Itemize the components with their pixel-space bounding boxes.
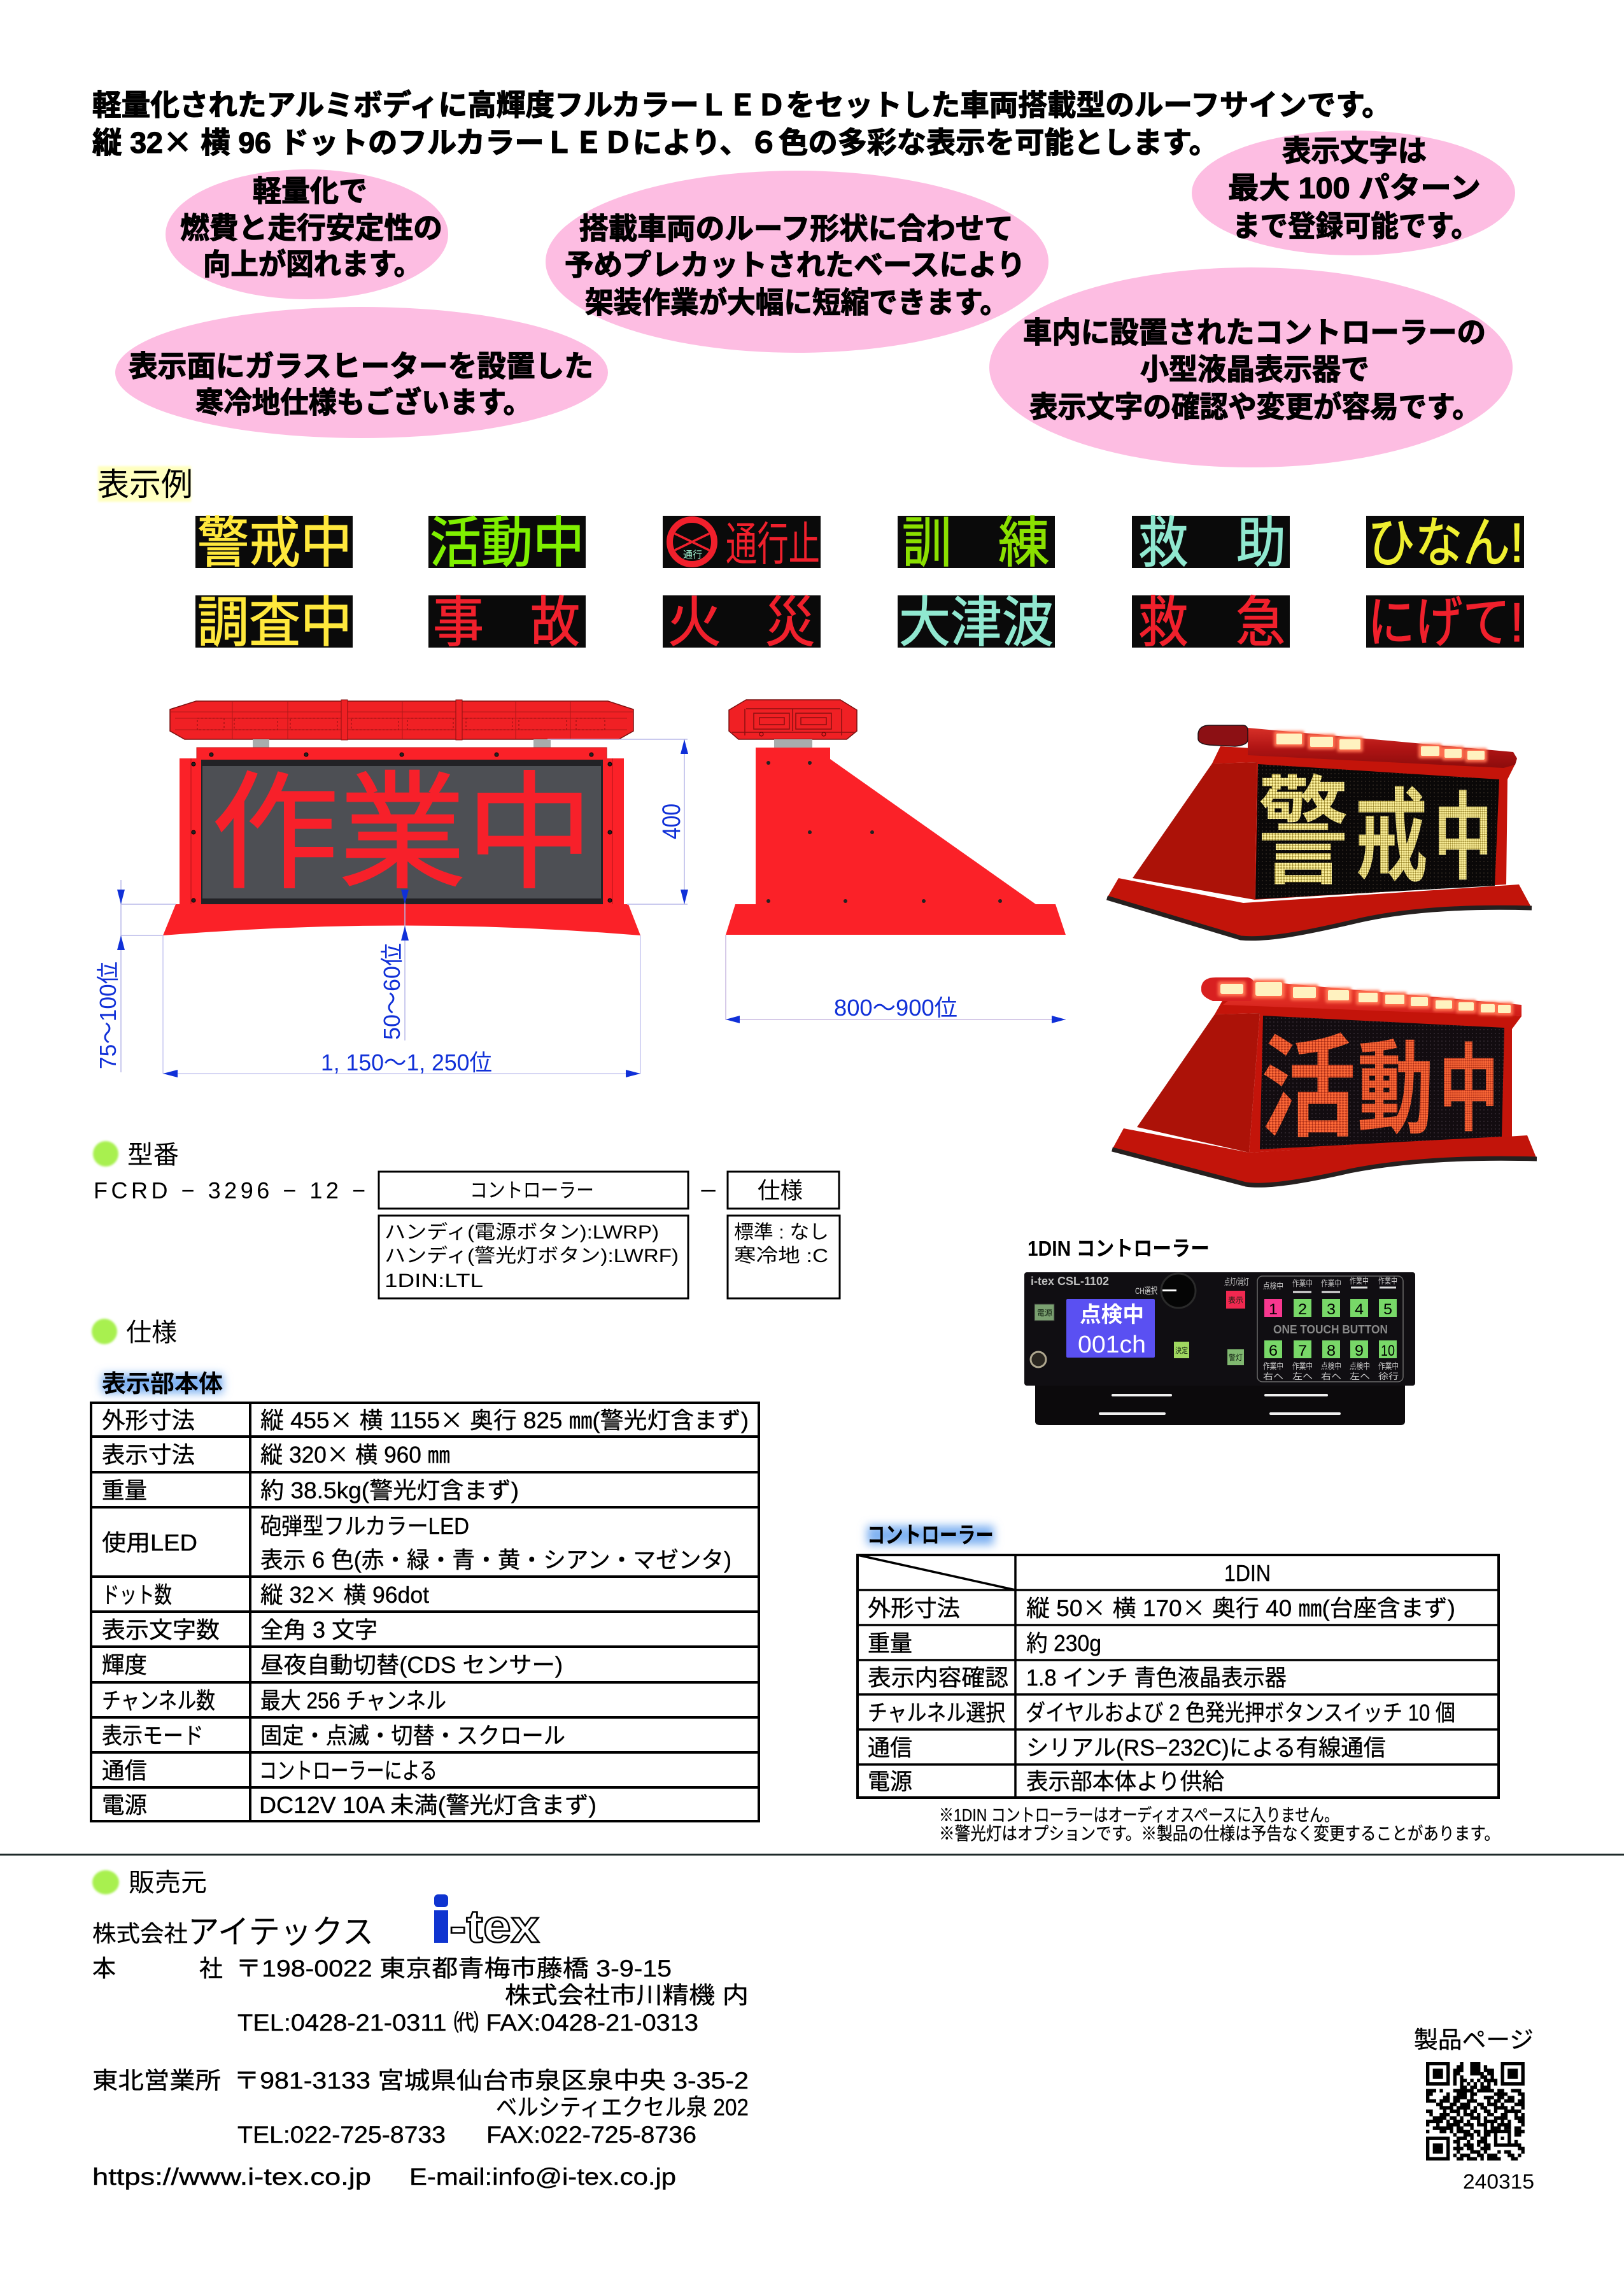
- one touch panel: 3: [1327, 1301, 1336, 1318]
- dimension: 50〜60: [379, 890, 409, 1040]
- callout: コントローラー: 表示文字の確認や変更が容易です。: [1029, 390, 1481, 423]
- callout: 表示文字登録: 表示文字は: [1282, 134, 1427, 167]
- head office address: 本: [92, 1956, 116, 1982]
- one touch panel: 作業中: [1350, 1276, 1369, 1286]
- logo: i-tex: [434, 1894, 539, 1952]
- callout: 架装作業: [546, 171, 1049, 353]
- callout: 寒冷地仕様: 寒冷地仕様もございます。: [195, 386, 532, 419]
- tile: 救急: [1132, 592, 1290, 653]
- row: 電源: [868, 1768, 1224, 1794]
- Tohoku office address: [92, 2068, 749, 2148]
- intro text: 軽量化されたアルミボディに高輝度フルカラーＬＥＤをセットした車両搭載型のルーフサインです。: [92, 89, 1391, 122]
- LCD screen: 点検中: [1080, 1303, 1144, 1327]
- callout: 寒冷地仕様: 表示面にガラスヒーターを設置した: [129, 350, 593, 383]
- side buttons: 決定: [1175, 1346, 1188, 1355]
- dimension: depth: [726, 935, 1066, 1023]
- Tohoku office address: 〒981-3133 宮城県仙台市泉区泉中央 3-35-2: [234, 2068, 749, 2094]
- callout: コントローラー: 小型液晶表示器で: [1140, 353, 1369, 386]
- Tohoku office address: TEL:022-725-8733: [237, 2122, 446, 2148]
- head office address: TEL:0428-21-0311 ㈹ FAX:0428-21-0313: [237, 2010, 698, 2036]
- tile: 調査中: 調査中: [197, 592, 352, 653]
- callout: 表示文字登録: [1192, 131, 1515, 255]
- photo: 活動中: 動: [1357, 1032, 1434, 1146]
- QR code: [1426, 2062, 1525, 2161]
- photo: 警戒中: [1107, 725, 1532, 939]
- tile: 救助: 救: [1138, 513, 1188, 574]
- row: 輝度: 輝度: [102, 1652, 147, 1678]
- one touch panel: 5: [1383, 1301, 1392, 1318]
- Tohoku office address: ベルシティエクセル泉 202: [496, 2094, 749, 2120]
- company name: アイテックス: [188, 1914, 374, 1951]
- heading: 表示例: 表示例: [97, 467, 193, 502]
- dimension: 50〜60: 50〜60位: [379, 943, 405, 1040]
- side buttons: 警灯: [1229, 1352, 1243, 1362]
- row: 重量: 重量: [868, 1630, 912, 1656]
- table: display unit specs: [91, 1402, 759, 1821]
- row: チャルネル選択: ダイヤルおよび 2 色発光押ボタンスイッチ 10 個: [1026, 1700, 1455, 1726]
- controller options: 1DIN:LTL: [385, 1270, 483, 1291]
- intro text: 縦 32× 横 96 ドットのフルカラーＬＥＤにより、６色の多彩な表示を可能とします。: [92, 120, 1218, 162]
- row: 表示モード: 固定・点滅・切替・スクロール: [260, 1722, 565, 1749]
- photo: 警戒中: 警: [1258, 767, 1348, 898]
- one touch panel: 2: [1298, 1301, 1307, 1318]
- row: 通信: 通信: [102, 1757, 147, 1784]
- tile: 通行止: 通行止: [726, 520, 820, 571]
- tile: 通行止: [663, 516, 821, 571]
- row: 電源: 表示部本体より供給: [1026, 1768, 1224, 1794]
- caption: 1DIN コントローラー: 1DIN コントローラー: [1027, 1237, 1210, 1260]
- dimension: height 400: [547, 739, 688, 904]
- spec options: 標準 : なし: [734, 1222, 829, 1243]
- one touch panel: 右へ: [1263, 1372, 1283, 1381]
- dimension: 75〜100: 75〜100位: [95, 962, 121, 1069]
- section: 型番: 型番: [127, 1141, 179, 1169]
- head office address: 株式会社市川精機 内: [505, 1982, 749, 2008]
- web and email: https://www.i-tex.co.jp: [92, 2164, 371, 2190]
- callout: 架装作業: 予めプレカットされたベースにより: [565, 248, 1026, 281]
- tile: 救急: 救: [1138, 592, 1188, 653]
- tile: 事故: [428, 592, 586, 653]
- section: 販売元: 販売元: [129, 1869, 207, 1897]
- table: controller specs: [858, 1555, 1499, 1798]
- callout: コントローラー: 車内に設置されたコントローラーの: [1023, 316, 1486, 349]
- row: 重量: 約 230g: [1026, 1630, 1101, 1656]
- row: 電源: 電源: [102, 1792, 147, 1818]
- row: 表示内容確認: 1.8 インチ 青色液晶表示器: [1026, 1665, 1287, 1691]
- row: 表示内容確認: 表示内容確認: [868, 1665, 1008, 1691]
- controller options: ハンディ(警光灯ボタン):LWRF): [385, 1246, 679, 1267]
- row: チャルネル選択: [868, 1700, 1455, 1726]
- tile: 警戒中: 警戒中: [197, 513, 352, 574]
- LCD screen: [1066, 1299, 1155, 1358]
- row: チャルネル選択: チャルネル選択: [868, 1700, 1005, 1726]
- row: 表示文字数: 全角 3 文字: [260, 1617, 378, 1643]
- row: 外形寸法: 外形寸法: [868, 1595, 960, 1621]
- section: 販売元: [92, 1869, 207, 1897]
- callout: 軽量化: [166, 169, 448, 299]
- row: ドット数: ドット数: [102, 1582, 172, 1608]
- controller options: [379, 1216, 688, 1298]
- row: 表示寸法: 縦 320× 横 960 ㎜: [260, 1437, 450, 1470]
- one touch panel: 9: [1355, 1342, 1364, 1360]
- section: 型番: [93, 1141, 179, 1169]
- one touch panel: ONE TOUCH BUTTON: [1273, 1323, 1388, 1336]
- row: 電源: DC12V 10A 未満(警光灯含まず): [259, 1792, 597, 1818]
- one touch panel: 8: [1327, 1342, 1336, 1360]
- photo: 活動中: 中: [1439, 1037, 1499, 1143]
- one touch panel: 作業中: [1378, 1361, 1399, 1371]
- tile: 大津波: 大津波: [899, 592, 1054, 653]
- row: 通信: コントローラーによる: [259, 1757, 437, 1784]
- row: 表示寸法: 表示寸法: [102, 1442, 195, 1468]
- one touch panel: 点検中: [1263, 1281, 1283, 1291]
- photo: 活動中: [1112, 977, 1537, 1186]
- one touch panel: 作業中: [1378, 1276, 1397, 1286]
- dimension: height 400: 400: [658, 804, 686, 839]
- row: 外形寸法: 外形寸法: [102, 1407, 195, 1433]
- model number: FCRD − 3296 − 12 −: [94, 1177, 365, 1203]
- dimension: 75〜100: [95, 880, 176, 1072]
- row: 通信: [868, 1735, 1386, 1761]
- tile: 事故: 事: [433, 592, 484, 653]
- tile: 訓練: 訓: [902, 513, 952, 574]
- tile: 活動中: 活動中: [430, 513, 584, 574]
- company name: [92, 1914, 374, 1951]
- tile: 訓練: [898, 513, 1055, 574]
- row: 表示寸法: [102, 1437, 450, 1470]
- tile: 救助: 助: [1236, 513, 1286, 574]
- row: ドット数: [102, 1577, 429, 1610]
- side buttons: 電源: [1037, 1309, 1052, 1317]
- row: 電源: 電源: [868, 1768, 912, 1794]
- web and email: E-mail:info@i-tex.co.jp: [409, 2164, 676, 2190]
- callout: 表示文字登録: まで登録可能です。: [1232, 209, 1479, 243]
- warning light bar: [170, 700, 633, 740]
- one touch panel: 1: [1269, 1301, 1278, 1318]
- web and email: [92, 2164, 676, 2190]
- one touch panel: 作業中: [1292, 1279, 1313, 1288]
- model number: 仕様: [758, 1177, 803, 1203]
- side buttons: [1031, 1277, 1249, 1367]
- intro text: [92, 89, 1391, 162]
- row: 外形寸法: 縦 455× 横 1155× 奥行 825 ㎜(警光灯含まず): [260, 1402, 749, 1435]
- one touch panel: 作業中: [1321, 1279, 1341, 1288]
- one touch panel: 点検中: [1321, 1361, 1341, 1371]
- controller device photo: [1024, 1272, 1415, 1425]
- section: 仕様: [92, 1319, 177, 1347]
- tile: 通行止: 通行: [683, 550, 702, 560]
- side buttons: 表示: [1228, 1296, 1243, 1305]
- row: 表示内容確認: [868, 1665, 1287, 1691]
- row: 重量: [868, 1630, 1101, 1656]
- row: 使用LED: [102, 1513, 731, 1573]
- callout: 表示文字登録: 最大 100 パターン: [1228, 171, 1481, 204]
- photo: 活動中: 活: [1260, 1026, 1356, 1151]
- callout: 架装作業: 架装作業が大幅に短縮できます。: [585, 286, 1008, 319]
- company name: 株式会社: [92, 1920, 188, 1947]
- tile: 火災: [663, 592, 821, 653]
- spec options: [728, 1216, 840, 1298]
- callout: 寒冷地仕様: [115, 307, 608, 438]
- Tohoku office address: 東北営業所: [92, 2068, 221, 2094]
- row: 通信: シリアル(RS−232C)による有線通信: [1026, 1735, 1386, 1761]
- one touch panel: 6: [1269, 1342, 1278, 1360]
- label: 製品ページ: 製品ページ: [1414, 2027, 1534, 2053]
- one touch panel: 右へ: [1321, 1372, 1341, 1381]
- Tohoku office address: FAX:022-725-8736: [486, 2122, 696, 2148]
- tile: にげて！: にげて!: [1367, 592, 1523, 653]
- heading: コントローラー: コントローラー: [867, 1522, 994, 1548]
- light bar side: [729, 700, 857, 739]
- footnotes: ※1DIN コントローラーはオーディオスペースに入りません。: [939, 1805, 1339, 1825]
- one touch panel: [1257, 1276, 1403, 1382]
- side elevation drawing: [726, 700, 1066, 935]
- row: 通信: [102, 1757, 437, 1784]
- callout: 架装作業: 搭載車両のルーフ形状に合わせて: [579, 212, 1013, 245]
- one touch panel: 4: [1355, 1301, 1364, 1318]
- one touch panel: 点検中: [1350, 1361, 1370, 1371]
- callout: 軽量化: 燃費と走行安定性の: [180, 211, 442, 245]
- one touch panel: 作業中: [1292, 1361, 1313, 1371]
- heading: 表示部本体: 表示部本体: [102, 1371, 223, 1398]
- dial: [1135, 1274, 1196, 1308]
- sign body: 作業中: [211, 763, 593, 905]
- callout: 軽量化: 向上が図れます。: [203, 248, 421, 281]
- row: 重量: 約 38.5kg(警光灯含まず): [260, 1477, 519, 1503]
- tile: 訓練: 練: [998, 513, 1049, 574]
- controller options: ハンディ(電源ボタン):LWRP): [385, 1222, 659, 1243]
- spec options: 寒冷地 :C: [734, 1246, 828, 1267]
- document code: 240315: [1463, 2170, 1534, 2193]
- one touch panel: 7: [1298, 1342, 1307, 1360]
- base: [163, 904, 640, 935]
- side buttons: 点灯/消灯: [1224, 1277, 1249, 1287]
- row: 表示文字数: 表示文字数: [102, 1617, 220, 1643]
- LCD screen: 001ch: [1078, 1331, 1146, 1358]
- tile: 火災: 火: [668, 592, 721, 653]
- one touch panel: 左へ: [1350, 1372, 1370, 1381]
- head office address: [92, 1956, 749, 2036]
- front elevation drawing: [163, 700, 640, 935]
- row: 重量: [102, 1477, 519, 1503]
- tile: ひなん！: ひなん!: [1367, 513, 1523, 574]
- dimension: depth: 800〜900位: [834, 995, 957, 1021]
- row: 表示文字数: [102, 1617, 378, 1643]
- section: 仕様: 仕様: [126, 1319, 177, 1347]
- row: 外形寸法: 縦 50× 横 170× 奥行 40 ㎜(台座含まず): [1026, 1590, 1455, 1623]
- one touch panel: 10: [1381, 1342, 1395, 1360]
- model number: コントローラー: [470, 1179, 594, 1202]
- row: 電源: [102, 1792, 597, 1818]
- logo: i-tex: -tex: [449, 1901, 539, 1952]
- model number: [94, 1172, 839, 1209]
- one touch panel: 作業中: [1263, 1361, 1283, 1371]
- dimension: width: 1, 150〜1, 250位: [321, 1049, 492, 1076]
- one touch panel: 徐行: [1378, 1372, 1399, 1381]
- row: 重量: 重量: [102, 1477, 147, 1503]
- photo: 警戒中: 中: [1434, 785, 1492, 892]
- head office address: 社: [199, 1956, 223, 1982]
- model number: −: [700, 1177, 717, 1203]
- row: 使用LED: 砲弾型フルカラーLED: [260, 1513, 469, 1539]
- row: チャンネル数: [102, 1687, 446, 1714]
- footnotes: [939, 1805, 1500, 1843]
- row: チャンネル数: 最大 256 チャンネル: [260, 1687, 446, 1714]
- tile: 救急: 急: [1236, 592, 1285, 653]
- one touch panel: 左へ: [1292, 1372, 1313, 1381]
- row: 輝度: 昼夜自動切替(CDS センサー): [260, 1652, 563, 1678]
- row: 表示モード: 表示モード: [102, 1722, 204, 1749]
- tile: 救助: [1132, 513, 1290, 574]
- row: 1DIN header: 1DIN: [1224, 1560, 1271, 1586]
- mounting bracket: [1035, 1386, 1405, 1425]
- callout: 軽量化: 軽量化で: [253, 174, 367, 208]
- tile: 事故: 故: [530, 592, 580, 653]
- callout: コントローラー: [989, 267, 1513, 467]
- row: 輝度: [102, 1652, 563, 1678]
- dimension: width: [163, 935, 640, 1077]
- photo: 警戒中: 戒: [1355, 780, 1428, 894]
- dial: CH選択: [1135, 1286, 1157, 1296]
- row: チャンネル数: チャンネル数: [102, 1687, 215, 1714]
- row: 表示モード: [102, 1722, 565, 1749]
- row: ドット数: 縦 32× 横 96dot: [260, 1577, 429, 1610]
- row: 通信: 通信: [868, 1735, 912, 1761]
- tile: 火災: 災: [765, 592, 815, 653]
- head office address: 〒198-0022 東京都青梅市藤橋 3-9-15: [236, 1956, 672, 1982]
- footnotes: ※警光灯はオプションです。※製品の仕様は予告なく変更することがあります。: [939, 1824, 1500, 1843]
- brand label: i-tex CSL-1102: [1031, 1275, 1109, 1288]
- row: 使用LED: 表示 6 色(赤・緑・青・黄・シアン・マゼンタ): [260, 1547, 731, 1573]
- LED examples: [195, 513, 1524, 653]
- row: 使用LED: 使用LED: [102, 1530, 197, 1556]
